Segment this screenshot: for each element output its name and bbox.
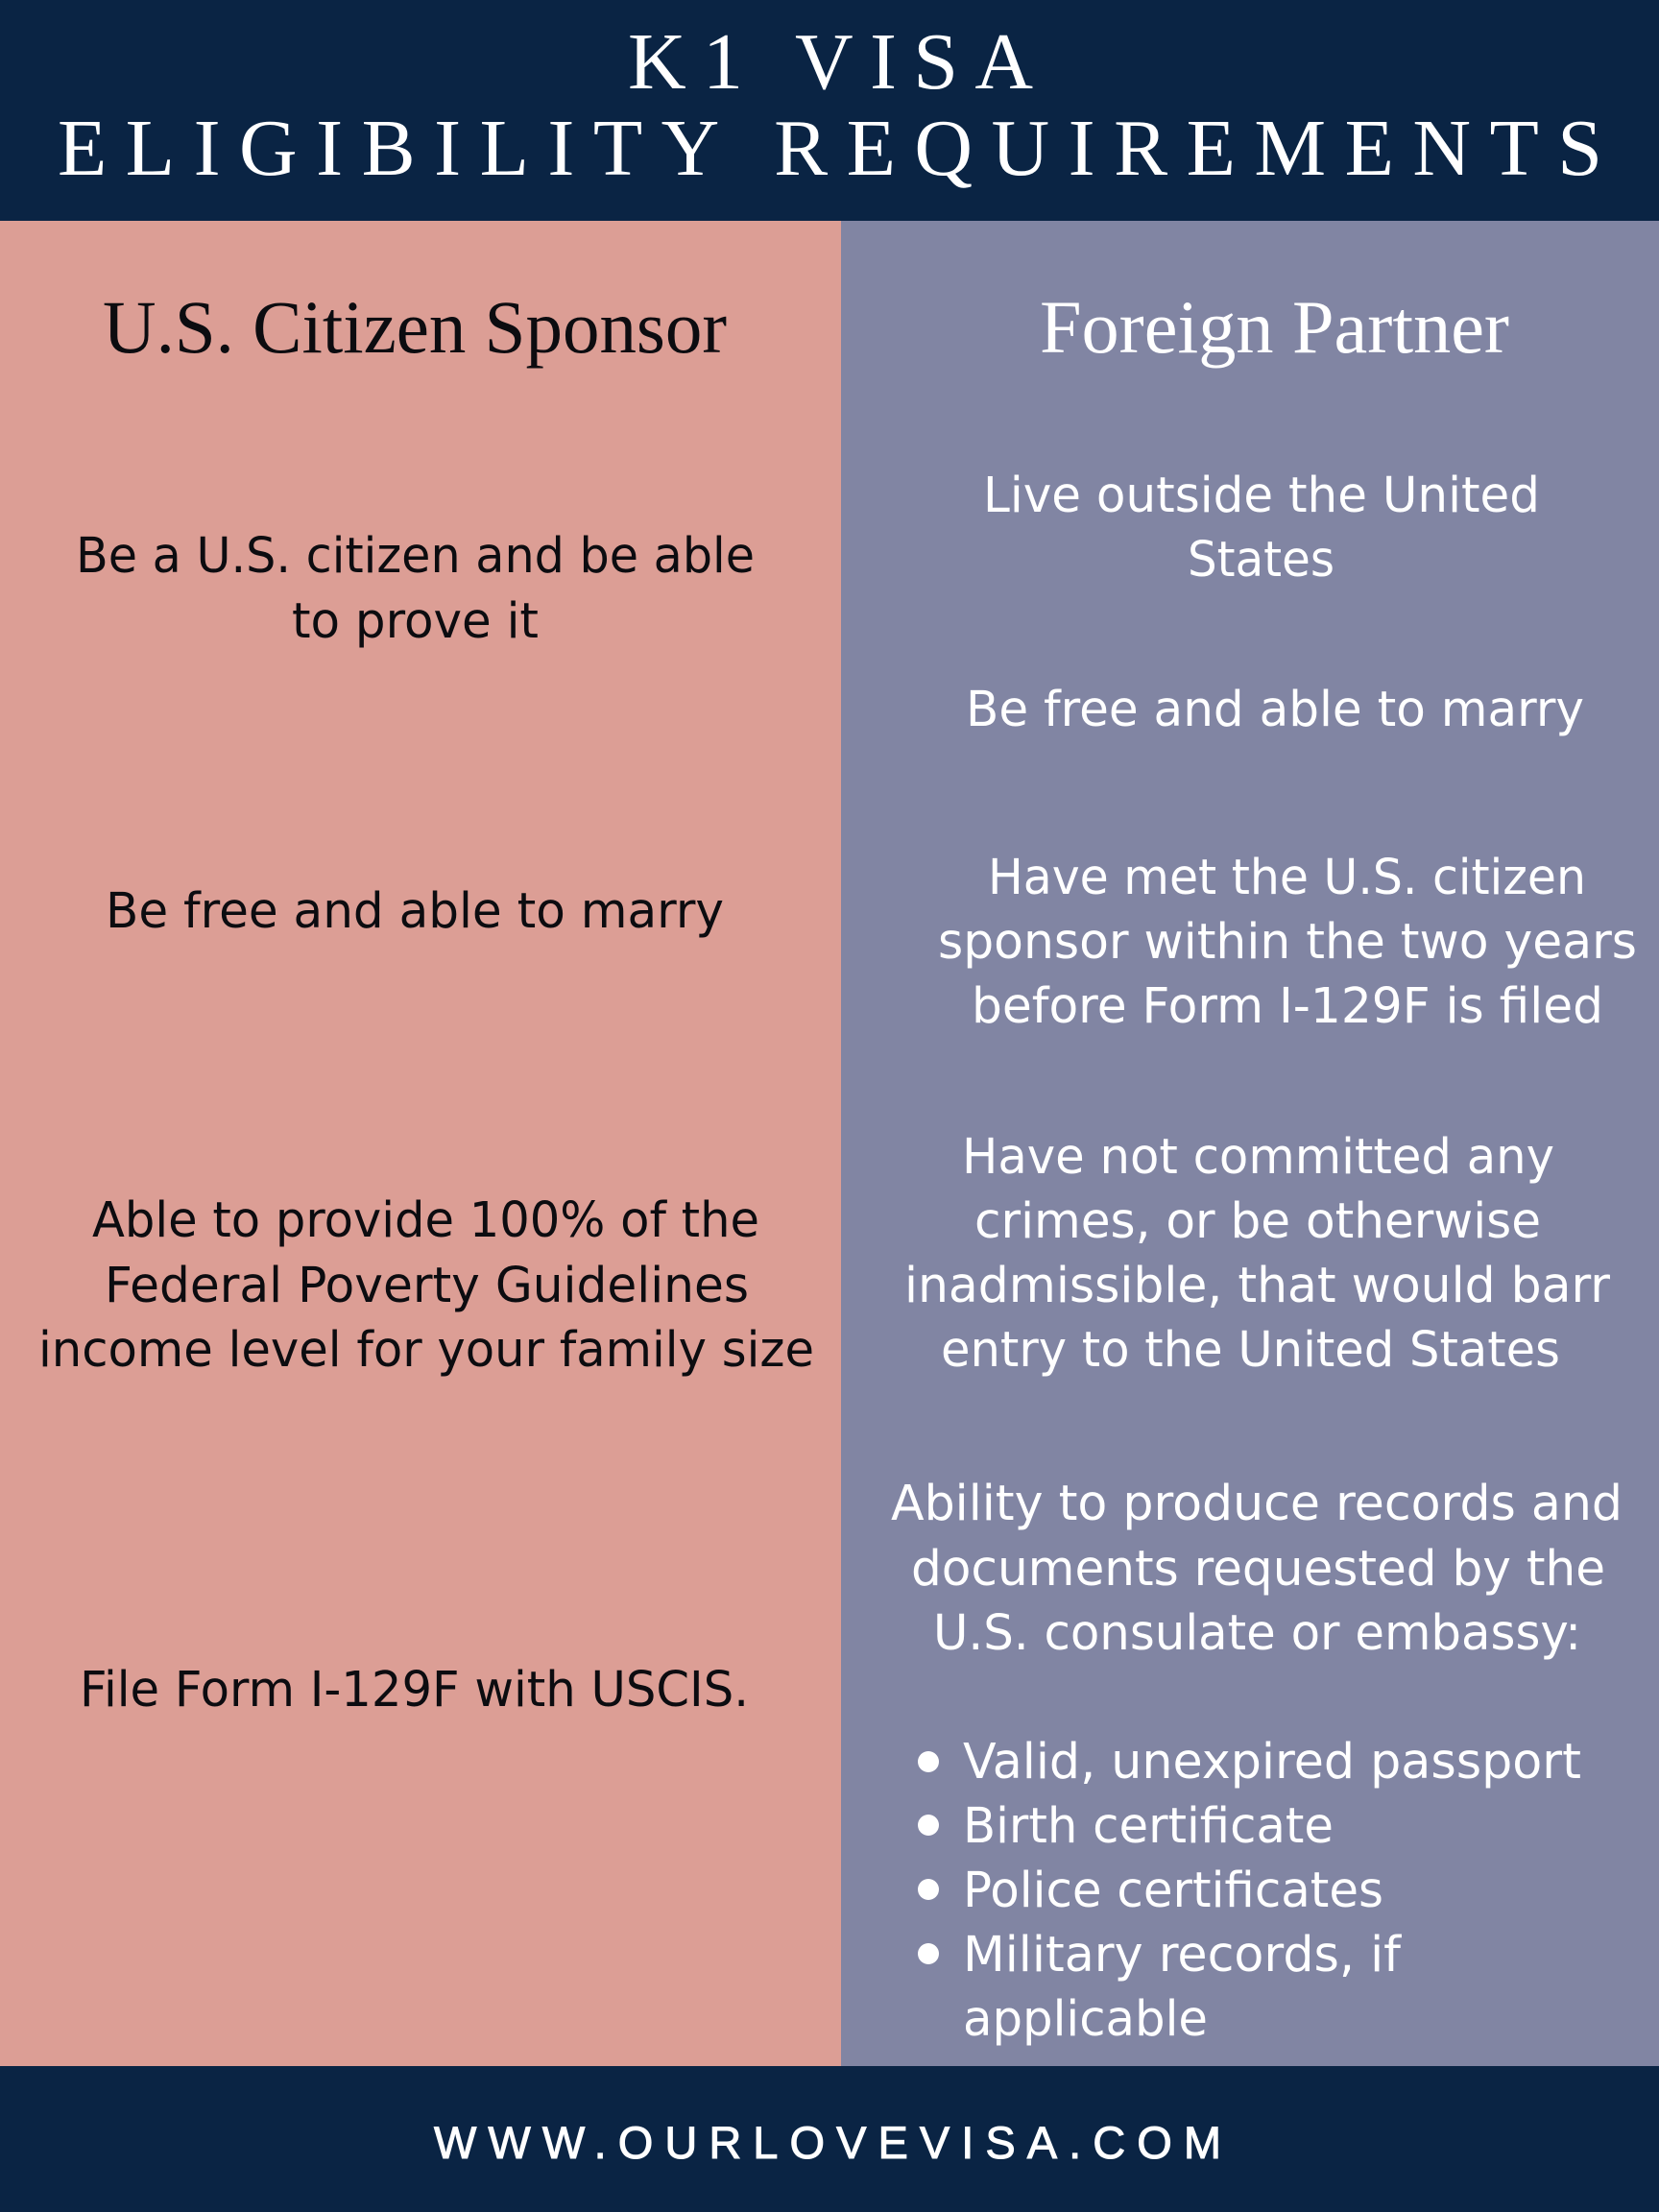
text: free to marry: Be free and able to marry xyxy=(106,882,724,939)
title xyxy=(58,17,1602,193)
text: file form: File Form I-129F with USCIS. xyxy=(80,1661,749,1718)
text: have met sponsor: Have met the U.S. citizen xyxy=(988,849,1586,905)
text: income requirement: Federal Poverty Guidelines xyxy=(105,1257,749,1313)
text: income requirement xyxy=(38,1191,814,1378)
list: required documents: applicable xyxy=(963,1990,1208,2047)
footer website: WWW.OURLOVEVISA.COM xyxy=(434,2117,1221,2168)
list: required documents: Birth certificate xyxy=(963,1797,1334,1854)
list: required documents xyxy=(918,1733,1581,2047)
text: produce records: U.S. consulate or embassy: xyxy=(933,1604,1581,1661)
panel: header band xyxy=(0,0,1659,221)
panel: U.S. citizen sponsor xyxy=(0,221,841,2066)
text: no crimes: Have not committed any xyxy=(962,1128,1554,1185)
text: produce records: Ability to produce records and xyxy=(891,1475,1623,1531)
text: have met sponsor: before Form I-129F is filed xyxy=(972,977,1603,1034)
text: no crimes: crimes, or be otherwise xyxy=(974,1192,1541,1249)
title: K1 VISA xyxy=(628,17,1033,107)
panel: foreign partner xyxy=(841,221,1659,2066)
text: live outside US: States xyxy=(1188,531,1334,588)
list: required documents: Military records, if xyxy=(963,1926,1402,1983)
text: no crimes xyxy=(904,1128,1610,1378)
panel: footer band xyxy=(0,2066,1659,2212)
list: required documents: Police certificates xyxy=(963,1862,1383,1918)
text: live outside US: Live outside the United xyxy=(983,467,1540,523)
heading: U.S. Citizen Sponsor: U.S. Citizen Sponsor xyxy=(103,285,727,369)
text: no crimes: entry to the United States xyxy=(941,1321,1560,1378)
text: no crimes: inadmissible, that would barr xyxy=(904,1257,1610,1313)
text: free to marry: Be free and able to marry xyxy=(966,681,1584,737)
text: income requirement: income level for your family size xyxy=(38,1321,814,1378)
text: live outside US xyxy=(983,467,1540,588)
text: prove citizenship: Be a U.S. citizen and be able xyxy=(76,527,755,584)
text: have met sponsor: sponsor within the two years xyxy=(938,913,1637,970)
text: have met sponsor xyxy=(938,849,1637,1034)
text: produce records: documents requested by the xyxy=(911,1540,1605,1597)
text: income requirement: Able to provide 100% of the xyxy=(92,1191,759,1248)
text: produce records xyxy=(891,1475,1623,1661)
heading: Foreign Partner: Foreign Partner xyxy=(1040,285,1509,369)
list: required documents: Valid, unexpired passport xyxy=(963,1733,1581,1790)
title: ELIGIBILITY REQUIREMENTS xyxy=(58,104,1602,193)
text: prove citizenship xyxy=(76,527,755,649)
text: prove citizenship: to prove it xyxy=(292,592,539,649)
